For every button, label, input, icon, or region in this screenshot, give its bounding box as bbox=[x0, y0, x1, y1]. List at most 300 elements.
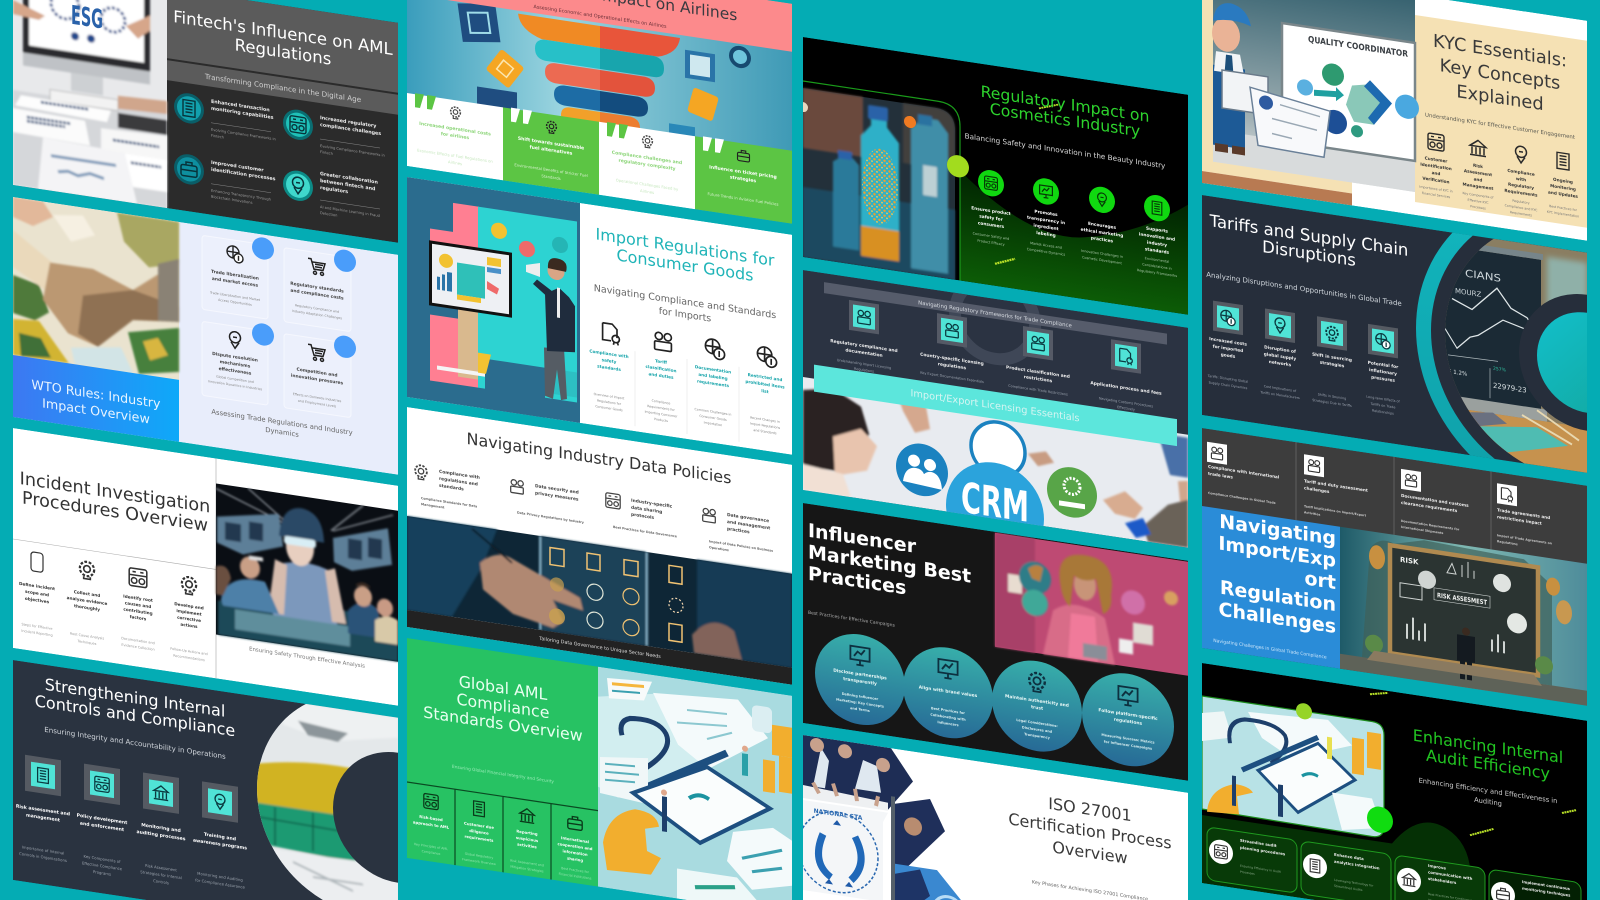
title: Key Concepts bbox=[1440, 55, 1560, 94]
card: regulatory standards: and compliance costs bbox=[290, 288, 344, 302]
item: monitoring: auditing processes bbox=[137, 829, 186, 842]
item: customer identification: and bbox=[1432, 170, 1440, 176]
circle: disclose partnerships bbox=[815, 628, 905, 731]
item: monitoring: Strategies for Internal bbox=[140, 869, 182, 880]
icon: plane bbox=[547, 121, 556, 134]
icon: plane crossing bbox=[451, 106, 460, 120]
dark ring and teal circle bbox=[1519, 285, 1600, 441]
item: customer identification bbox=[1419, 132, 1453, 200]
circle: disclose partnerships: Defining Influencer bbox=[842, 692, 879, 701]
title: Regulatory Impact on bbox=[981, 82, 1149, 126]
item: regulatory compliance: Requirements bbox=[1510, 210, 1532, 218]
item: sourcing strategies: Shift in sourcing bbox=[1312, 352, 1352, 363]
title: Controls and Compliance bbox=[35, 691, 235, 740]
item: ongoing monitoring: and Updates bbox=[1548, 190, 1578, 199]
icon: bank bbox=[1470, 139, 1486, 157]
photo: influencer with pink wall bbox=[995, 533, 1188, 676]
photo: CRM team meeting bbox=[803, 377, 1188, 590]
item: customer due diligence bbox=[462, 799, 496, 866]
icon: bank bbox=[1403, 873, 1415, 887]
icon: ledger bbox=[1557, 152, 1569, 170]
item: regulatory compliance bbox=[1504, 144, 1538, 218]
icon: calculator bbox=[290, 116, 306, 134]
panel: WTO rules slide bbox=[13, 197, 398, 475]
item: fintech collaboration: Detection bbox=[320, 211, 337, 218]
card: regulatory standards: Industry Adaptation Challenges bbox=[292, 309, 342, 320]
title: Global AML bbox=[459, 672, 547, 704]
card: operational costs: Airlines bbox=[448, 159, 462, 166]
subtitle: Ensuring Integrity and Accountability in Operations bbox=[44, 725, 226, 761]
item: product safety: Ensures product bbox=[971, 205, 1011, 217]
subtitle: Auditing bbox=[1474, 796, 1502, 808]
card: continuous monitoring: Implement continuous bbox=[1522, 879, 1571, 891]
item: policy development: Effective Compliance bbox=[82, 860, 123, 871]
item: tariff classification: Products bbox=[654, 417, 668, 423]
item: regulatory documentation: Understanding Import Licensing bbox=[837, 358, 891, 370]
item: reporting suspicious activities: Risk Assessment and bbox=[510, 858, 544, 868]
photo: bottles with orange beads bbox=[798, 80, 960, 281]
icon: cart bbox=[308, 258, 325, 276]
item: risk based approach bbox=[413, 792, 450, 857]
illustration: man with megaphone at monitor bbox=[407, 177, 580, 423]
circle: disclose partnerships: Disclose partnerships bbox=[833, 668, 887, 682]
item: corrective actions: Recommendations bbox=[173, 654, 205, 662]
card: competition: Effects on Domestic Industries bbox=[293, 392, 342, 403]
icon: worker bbox=[1032, 336, 1044, 351]
icon: aircraft bbox=[643, 135, 652, 148]
item: product safety: safety for bbox=[979, 213, 1004, 223]
chalkboard photo in circle: 5 1.2% bbox=[1448, 369, 1467, 378]
panel: Tariffs and supply chain slide bbox=[1202, 138, 1600, 534]
item: labeling transparency: ingredient bbox=[1033, 223, 1059, 232]
item: fintech collaboration: regulators bbox=[320, 185, 348, 195]
item: ongoing monitoring: Best Practices for bbox=[1549, 204, 1578, 212]
item: data security bbox=[511, 479, 585, 525]
photo: CRM team meeting: CRM bbox=[961, 473, 1029, 532]
item: transaction monitoring: Evolving Compliance Frameworks in bbox=[211, 128, 276, 141]
card: dispute resolution: mechanisms bbox=[220, 359, 251, 370]
icon: helmet bbox=[182, 576, 196, 595]
item: identify causes: Documentation and bbox=[121, 636, 155, 645]
item: trade agreements: Trade agreements and bbox=[1497, 507, 1550, 520]
item: innovation standards: industry bbox=[1147, 240, 1167, 249]
item: risk assessment: Assessment bbox=[1464, 168, 1492, 177]
item: sharing protocols: Industry-specific bbox=[631, 498, 673, 510]
title box: ort bbox=[1305, 566, 1336, 594]
title: Procedures Overview bbox=[22, 488, 208, 536]
item: training: Training and bbox=[204, 832, 236, 842]
item: labeling transparency: Competitive Dynamics bbox=[1027, 247, 1065, 257]
icon: calculator bbox=[1428, 133, 1444, 151]
circle: authenticity: Legal Considerations: bbox=[1016, 718, 1058, 728]
photo: risk assessment chalkboard: RISK ASSESMEST bbox=[1437, 591, 1487, 607]
item: compliance: Compliance with bbox=[439, 469, 480, 481]
item: customer identification: Financial Services bbox=[1422, 191, 1451, 199]
item: monitoring: Risk Assessment bbox=[145, 863, 177, 873]
item: training: awareness programs bbox=[193, 838, 247, 852]
panel: Global AML compliance slide bbox=[407, 638, 792, 900]
title: Cosmetics Industry bbox=[990, 99, 1140, 141]
circle: disclose partnerships: transparently bbox=[843, 676, 877, 687]
item: tariff classification: Requirements for bbox=[647, 404, 675, 412]
item: sharing protocols: protocols bbox=[631, 512, 655, 521]
icon: people bbox=[858, 310, 870, 325]
item: collect evidence: Techniques bbox=[77, 639, 97, 646]
item: application process: Effectively bbox=[1117, 405, 1135, 412]
item: increased costs bbox=[1207, 300, 1248, 390]
item: tariff assessment: challenges bbox=[1304, 485, 1330, 494]
item: policy development: Key Components of bbox=[84, 854, 121, 864]
item: licensing regulations: regulations bbox=[938, 361, 966, 372]
card: dispute resolution bbox=[202, 314, 274, 406]
card: dispute resolution: Dispute resolution bbox=[212, 351, 258, 364]
card: data analytics: Leveraging Technology for bbox=[1334, 878, 1374, 888]
item: tariff classification: Tariff bbox=[655, 358, 668, 365]
item: ongoing monitoring: Ongoing bbox=[1553, 177, 1573, 185]
item: regulatory documentation: Regulations bbox=[854, 367, 874, 374]
item: corrective actions: implement bbox=[176, 608, 202, 617]
card: audit planning: planning procedures bbox=[1240, 845, 1286, 857]
card: competition: Competition and bbox=[297, 367, 337, 379]
caption band bbox=[407, 610, 792, 685]
item: product classification: Compliance with Trade Restrictions bbox=[1008, 384, 1068, 397]
title: Influencer bbox=[808, 519, 917, 558]
item: risk assessment: Effective KYC bbox=[1468, 198, 1489, 205]
item: ethical marketing: Innovation Challenges in bbox=[1081, 249, 1123, 259]
icon: briefcase bbox=[181, 161, 197, 178]
title box: Regulation bbox=[1220, 576, 1336, 616]
item: transaction monitoring: Fintech bbox=[211, 134, 224, 140]
icon: certificate bbox=[1501, 488, 1513, 503]
card: operational costs: Increased operational costs bbox=[419, 121, 491, 138]
item: customer identification: Customer bbox=[1425, 155, 1448, 164]
item: documentation: and labeling bbox=[698, 372, 728, 381]
item: safety standards: Regulations for bbox=[597, 399, 622, 406]
item: risk assessment: Controls in Organizations bbox=[19, 851, 67, 863]
item: customs clearance: International Shipments bbox=[1401, 525, 1444, 535]
item: labeling transparency: Market Access and bbox=[1030, 241, 1062, 250]
panel: Strengthening internal controls slide bbox=[13, 660, 398, 900]
item: data security: Data security and bbox=[535, 483, 579, 496]
title: Standards Overview bbox=[423, 703, 583, 745]
item: policy development: and enforcement bbox=[80, 821, 125, 833]
icon: people bbox=[511, 479, 523, 494]
item: customer identification: Enhancing Transparency Through bbox=[211, 189, 271, 202]
item: risk assessment: Management bbox=[1463, 182, 1493, 191]
item: licensing regulations bbox=[920, 311, 984, 384]
item: restricted items: and Standards bbox=[753, 428, 777, 435]
item: fintech collaboration bbox=[283, 170, 380, 217]
item: customer due diligence: Framework Overview bbox=[462, 857, 496, 866]
item: sourcing strategies: Shifts in Sourcing bbox=[1318, 392, 1346, 401]
item: data governance: practices bbox=[727, 526, 750, 535]
item: tariff classification: classification bbox=[646, 364, 676, 373]
item: tariff assessment: Activities bbox=[1304, 510, 1320, 517]
title band bbox=[814, 365, 1177, 446]
card: audit planning: Streamline audit bbox=[1240, 838, 1277, 848]
item: collect evidence: analyze evidence bbox=[67, 595, 108, 606]
item: define scope: Define incident bbox=[19, 581, 55, 591]
item: define scope: objectives bbox=[25, 596, 50, 604]
card: trade liberalization: Trade liberalization bbox=[211, 269, 259, 282]
item: reporting suspicious activities bbox=[510, 806, 544, 874]
item: innovation standards bbox=[1137, 192, 1177, 278]
strip text: Navigating Regulatory Frameworks for Trade Compliance bbox=[918, 300, 1072, 329]
card: compliance challenges: Compliance challenges and bbox=[612, 150, 682, 166]
item: corrective actions: Follow-Up Actions and bbox=[170, 647, 208, 656]
item: licensing regulations: Key Export Documentation Essentials bbox=[920, 371, 984, 384]
item: regulatory compliance: Compliance bbox=[1507, 168, 1535, 177]
item: training: Monitoring and Auditing bbox=[197, 871, 243, 883]
item: reporting suspicious activities: activities bbox=[517, 842, 538, 850]
title: Import Regulations for bbox=[596, 224, 775, 270]
item: labeling transparency: Promotes bbox=[1034, 209, 1058, 218]
card: audit planning: Ensuring Efficiency in Audit bbox=[1240, 864, 1282, 874]
item: disruption of networks: Cost Implications of bbox=[1264, 384, 1297, 393]
title: Audit Efficiency bbox=[1426, 746, 1550, 783]
item: tariff assessment: Tariff and duty assessment bbox=[1304, 478, 1368, 493]
icon: storefront bbox=[938, 659, 958, 680]
icon: briefcase bbox=[1497, 888, 1509, 900]
item: international cooperation: cooperation and bbox=[558, 841, 593, 851]
item: international cooperation: International bbox=[561, 835, 589, 844]
header band bbox=[167, 0, 398, 93]
decorative icons bbox=[458, 0, 751, 156]
icon: people bbox=[703, 508, 715, 523]
title: Explained bbox=[1456, 81, 1544, 115]
item: trade agreements: restrictions impact bbox=[1497, 514, 1542, 526]
item: risk assessment: Risk bbox=[1473, 163, 1483, 169]
icon: arrow growth bbox=[1376, 333, 1390, 349]
item: regulatory challenges: Increased regulatory bbox=[320, 115, 377, 130]
icon: certificate bbox=[603, 323, 619, 346]
circle: align brand values: Collaborating with bbox=[930, 713, 966, 722]
subtitle: Dynamics bbox=[265, 426, 299, 439]
item: corrective actions: actions bbox=[180, 622, 198, 629]
card: compliance challenges bbox=[599, 121, 695, 209]
title box: Navigating bbox=[1219, 510, 1336, 550]
icon: ledger bbox=[183, 100, 195, 117]
card: stakeholder communication: Improve bbox=[1428, 863, 1446, 871]
item: customer due diligence: Customer due bbox=[464, 821, 494, 830]
photo: risk assessment chalkboard: RISK bbox=[1400, 555, 1419, 567]
item: disruption of networks: global supply bbox=[1264, 351, 1296, 362]
accent circles bbox=[904, 81, 1059, 273]
item: fintech collaboration: AI and Machine Learning in Fraud bbox=[320, 205, 380, 218]
panel: Import regulations slide bbox=[407, 177, 792, 455]
circle: platform regulations: Follow platform-specific bbox=[1098, 707, 1158, 722]
circle: disclose partnerships: Marketing: Key Concepts bbox=[836, 697, 884, 709]
icon: cart bbox=[308, 344, 325, 362]
item: identify causes: Evidence Collection bbox=[121, 643, 155, 652]
panel: Navigating industry data policies slide bbox=[407, 407, 792, 685]
item: risk assessment: Risk assessment and bbox=[16, 803, 70, 818]
card: dispute resolution: Global Competition and bbox=[216, 374, 254, 384]
item: application process: Application process and fees bbox=[1090, 380, 1162, 397]
item: international trade laws: trade laws bbox=[1208, 471, 1233, 480]
item: regulatory compliance: Regulatory bbox=[1508, 182, 1534, 190]
circle: align brand values bbox=[903, 641, 993, 744]
subtitle: Analyzing Disruptions and Opportunities in Global Trade bbox=[1206, 270, 1402, 308]
circle: authenticity: Maintain authenticity and bbox=[1005, 693, 1069, 709]
panel: Fuel regulations impact on airlines slide bbox=[407, 0, 792, 224]
item: documentation: Consumer Goods bbox=[699, 414, 727, 422]
title: Overview bbox=[1052, 837, 1128, 868]
title box bbox=[1202, 506, 1340, 669]
icon: ledger bbox=[1310, 859, 1320, 873]
item: disruption of networks: Disruption of bbox=[1264, 344, 1296, 355]
item: data governance: Impact of Data Policies on Business bbox=[709, 539, 773, 553]
photo: ESG monitor on desk bbox=[13, 0, 167, 208]
photo: ESG monitor on desk: ESG bbox=[71, 1, 103, 35]
item: regulatory documentation: Regulatory compliance and bbox=[830, 338, 898, 354]
item: tariff classification: Compliance bbox=[652, 399, 670, 406]
item: transaction monitoring: monitoring capabilities bbox=[211, 106, 274, 121]
icon: bank bbox=[520, 808, 534, 823]
item: inflationary pressures: Long-term Effects of bbox=[1366, 395, 1400, 404]
item: product classification bbox=[1006, 323, 1070, 397]
icon: phone bbox=[1152, 201, 1162, 215]
item: ethical marketing: Cosmetic Development bbox=[1082, 255, 1122, 265]
item: customer identification: Identification bbox=[1420, 162, 1452, 171]
icon: globe goods bbox=[757, 346, 777, 368]
item: compliance: regulations and bbox=[439, 476, 478, 488]
item: safety standards: Consumer Goods bbox=[595, 404, 623, 412]
brown strip bbox=[1202, 171, 1352, 206]
title: Compliance bbox=[457, 690, 549, 722]
illustration: isometric audit documents bbox=[1202, 696, 1384, 838]
item: documentation: Common Challenges in bbox=[695, 407, 731, 417]
icon: pin bbox=[1516, 146, 1526, 164]
item: identify causes: factors bbox=[130, 614, 147, 622]
item: increased costs: Increased costs bbox=[1209, 336, 1247, 348]
card: continuous monitoring: monitoring techniques bbox=[1522, 886, 1571, 898]
item: data governance: and management bbox=[727, 519, 770, 531]
item: customer identification: Verification bbox=[1422, 175, 1450, 185]
item: sourcing strategies: strategies bbox=[1320, 360, 1345, 369]
item: ongoing monitoring: KYC Implementation bbox=[1547, 210, 1579, 219]
icon: globe coin bbox=[227, 245, 243, 264]
item: regulatory documentation bbox=[830, 297, 898, 377]
circle: authenticity: trust bbox=[1031, 704, 1043, 712]
subtitle: Navigating Compliance and Standards bbox=[594, 283, 776, 321]
item: reporting suspicious activities: Reporting bbox=[516, 828, 538, 837]
item: customer due diligence: Global Regulatory bbox=[465, 852, 493, 860]
item: innovation standards: Supports bbox=[1146, 225, 1168, 235]
panel: KYC essentials slide bbox=[1202, 0, 1587, 241]
card: trade liberalization: Trade Liberalization and Market bbox=[209, 290, 261, 302]
item: risk assessment: and bbox=[1474, 176, 1482, 183]
icon: pin bbox=[215, 794, 225, 810]
item: customs clearance: Documentation Requirements for bbox=[1401, 519, 1460, 532]
dark green strip bbox=[1202, 788, 1471, 900]
item: labeling transparency: labeling bbox=[1036, 230, 1056, 239]
card: dispute resolution: Innovation Dynamics in Industries bbox=[208, 379, 262, 391]
item: ethical marketing bbox=[1081, 184, 1123, 266]
subtitle: Assessing Economic and Operational Effects on Airlines bbox=[534, 4, 667, 30]
item: data governance: Operations bbox=[709, 545, 729, 552]
card: data analytics bbox=[1301, 841, 1391, 900]
circle: align brand values: Align with brand values bbox=[919, 684, 978, 699]
card: audit planning bbox=[1207, 827, 1297, 893]
card: ticket pricing: Influence on ticket pricing bbox=[709, 164, 777, 180]
item: customer identification: Blockchain Innovations bbox=[211, 195, 253, 205]
item: corrective actions: corrective bbox=[177, 615, 201, 623]
title box: Impact Overview bbox=[42, 396, 150, 428]
item: data security: Data Privacy Regulations by Industry bbox=[517, 511, 585, 525]
item: trade agreements: Impact of Trade Agreements on bbox=[1497, 533, 1552, 545]
item: risk based approach: Compliance bbox=[422, 849, 440, 856]
icon: device bbox=[606, 493, 620, 509]
item: ethical marketing: practices bbox=[1091, 235, 1113, 245]
title: Incident Investigation bbox=[20, 469, 210, 518]
title: KYC Essentials: bbox=[1433, 31, 1567, 72]
icon: growth bbox=[1275, 317, 1285, 334]
circle: platform regulations: regulations bbox=[1114, 717, 1142, 727]
item: monitoring: Monitoring and bbox=[141, 822, 181, 834]
item: tariff assessment bbox=[1304, 454, 1368, 524]
item: ongoing monitoring bbox=[1547, 151, 1579, 219]
item: identify causes: Identify root bbox=[123, 594, 153, 603]
card: operational costs bbox=[407, 92, 503, 180]
item: customer identification: identification processes bbox=[211, 167, 276, 182]
item: restricted items: Recent Changes in bbox=[750, 415, 780, 424]
item: product classification: Product classification and bbox=[1006, 364, 1070, 380]
title band bbox=[407, 0, 792, 52]
item: restricted items: Import Regulations bbox=[750, 421, 780, 430]
left cream block bbox=[1202, 0, 1352, 194]
item: sharing protocols: data sharing bbox=[631, 505, 662, 515]
item: international cooperation bbox=[558, 814, 593, 881]
card: continuous monitoring bbox=[1489, 869, 1581, 900]
dark circle overlay bbox=[333, 743, 463, 892]
title box: WTO Rules: Industry bbox=[31, 378, 161, 412]
photo: team around ISO emblem: NATIONAL STA bbox=[814, 808, 863, 822]
item: compliance: Compliance Standards for Data bbox=[421, 496, 477, 509]
card: sustainable fuel: Standards bbox=[541, 173, 561, 181]
circle: authenticity bbox=[992, 654, 1082, 758]
icon: grid map bbox=[129, 568, 147, 588]
subtitle: Assessing Trade Regulations and Industry bbox=[211, 408, 353, 437]
title: Disruptions bbox=[1262, 237, 1356, 270]
item: safety standards: safety bbox=[602, 357, 617, 364]
item: monitoring: Controls bbox=[153, 878, 169, 885]
item: customer due diligence: requirements bbox=[465, 834, 494, 843]
item: fintech collaboration: Greater collaboration bbox=[320, 171, 378, 186]
icon: gear head bbox=[80, 561, 94, 580]
icon: extinguisher bbox=[31, 552, 43, 572]
item: international trade laws: Compliance Challenges in Global Trade bbox=[1208, 491, 1276, 505]
item: inflationary pressures: Relationships bbox=[1372, 409, 1394, 416]
chalkboard photo in circle: CIANS bbox=[1465, 268, 1501, 285]
item: tariff assessment: Tariff Implications on Import/Export bbox=[1304, 504, 1367, 518]
item: documentation: Importation bbox=[704, 421, 722, 427]
card: compliance challenges: regulatory complexity bbox=[618, 158, 676, 172]
title: Marketing Best bbox=[808, 540, 971, 588]
icon: globe documents bbox=[705, 338, 725, 360]
card: compliance challenges: Operational Challenges Faced by bbox=[616, 177, 679, 192]
photo: hand checking governance checklist bbox=[407, 516, 792, 668]
card: sustainable fuel: fuel alternatives bbox=[530, 144, 573, 157]
card: competition bbox=[284, 327, 356, 418]
item: define scope: scope and bbox=[25, 589, 49, 597]
item: define scope: Steps for Effective bbox=[21, 622, 53, 631]
item: inflationary pressures: pressures bbox=[1371, 374, 1395, 384]
item: identify causes: contributing bbox=[123, 607, 153, 616]
card: trade liberalization bbox=[202, 228, 274, 320]
item: fintech collaboration: between fintech and bbox=[320, 178, 376, 192]
item: labeling transparency: transparency in bbox=[1027, 215, 1065, 226]
